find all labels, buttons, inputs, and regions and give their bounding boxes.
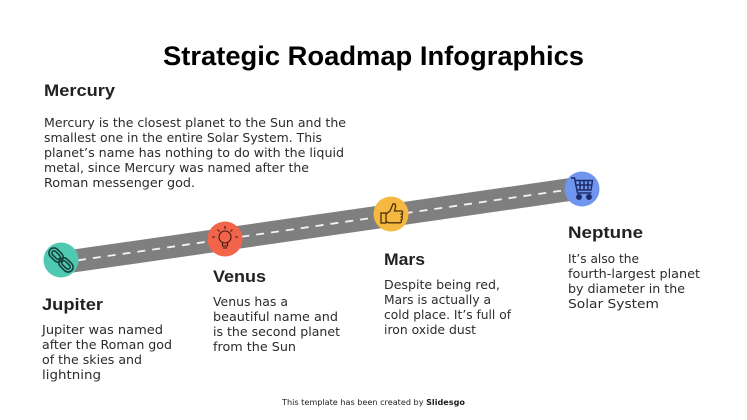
text block: Mercury: Mercury is the closest planet to the Sun and the (44, 115, 346, 130)
text block: Jupiter: after the Roman god (42, 337, 172, 352)
text block: Neptune: Neptune (568, 223, 643, 242)
text block: Mercury: metal, since Mercury was named after the (44, 160, 309, 175)
icon: chain link on teal circle (44, 242, 78, 278)
text block: Neptune: It’s also the (568, 251, 639, 266)
icon: shopping cart on blue circle (564, 172, 600, 206)
text block: Mercury: Mercury (44, 81, 116, 100)
text block: Neptune: Solar System (568, 296, 659, 311)
text block: Jupiter (41, 295, 172, 382)
text block: Mercury: planet’s name has nothing to do with the liquid (44, 145, 344, 160)
text block: Mars (384, 250, 512, 337)
icon: thumbs up on yellow circle (374, 196, 408, 232)
text block: Mars: Mars (384, 250, 425, 269)
text block: Venus: beautiful name and (213, 309, 338, 324)
text block: Jupiter: Jupiter was named (41, 322, 163, 337)
title: Strategic Roadmap Infographics (163, 41, 584, 71)
text block: Mercury: smallest one in the entire Solar System. This (44, 130, 322, 145)
text block: Mercury (44, 81, 346, 190)
text block: Venus: Venus (213, 267, 266, 286)
text block: Mars: Despite being red, (384, 277, 500, 292)
footer credit: This template has been created by Slidesgo (281, 398, 465, 407)
text block: Jupiter: lightning (42, 367, 101, 382)
icon: light bulb on red circle (208, 222, 242, 256)
text block: Venus (213, 267, 340, 354)
text block: Venus: Venus has a (213, 294, 288, 309)
text block: Mars: Mars is actually a (384, 292, 491, 307)
text block: Mars: iron oxide dust (384, 322, 476, 337)
text block: Neptune: by diameter in the (568, 281, 685, 296)
text block: Venus: is the second planet (213, 324, 340, 339)
road (61, 176, 582, 274)
text block: Neptune (568, 223, 700, 311)
text block: Mars: cold place. It’s full of (384, 307, 512, 322)
text block: Neptune: fourth-largest planet (568, 266, 700, 281)
text block: Venus: from the Sun (213, 339, 296, 354)
text block: Jupiter: Jupiter (42, 295, 103, 314)
text block: Mercury: Roman messenger god. (44, 175, 195, 190)
text block: Jupiter: of the skies and (42, 352, 142, 367)
